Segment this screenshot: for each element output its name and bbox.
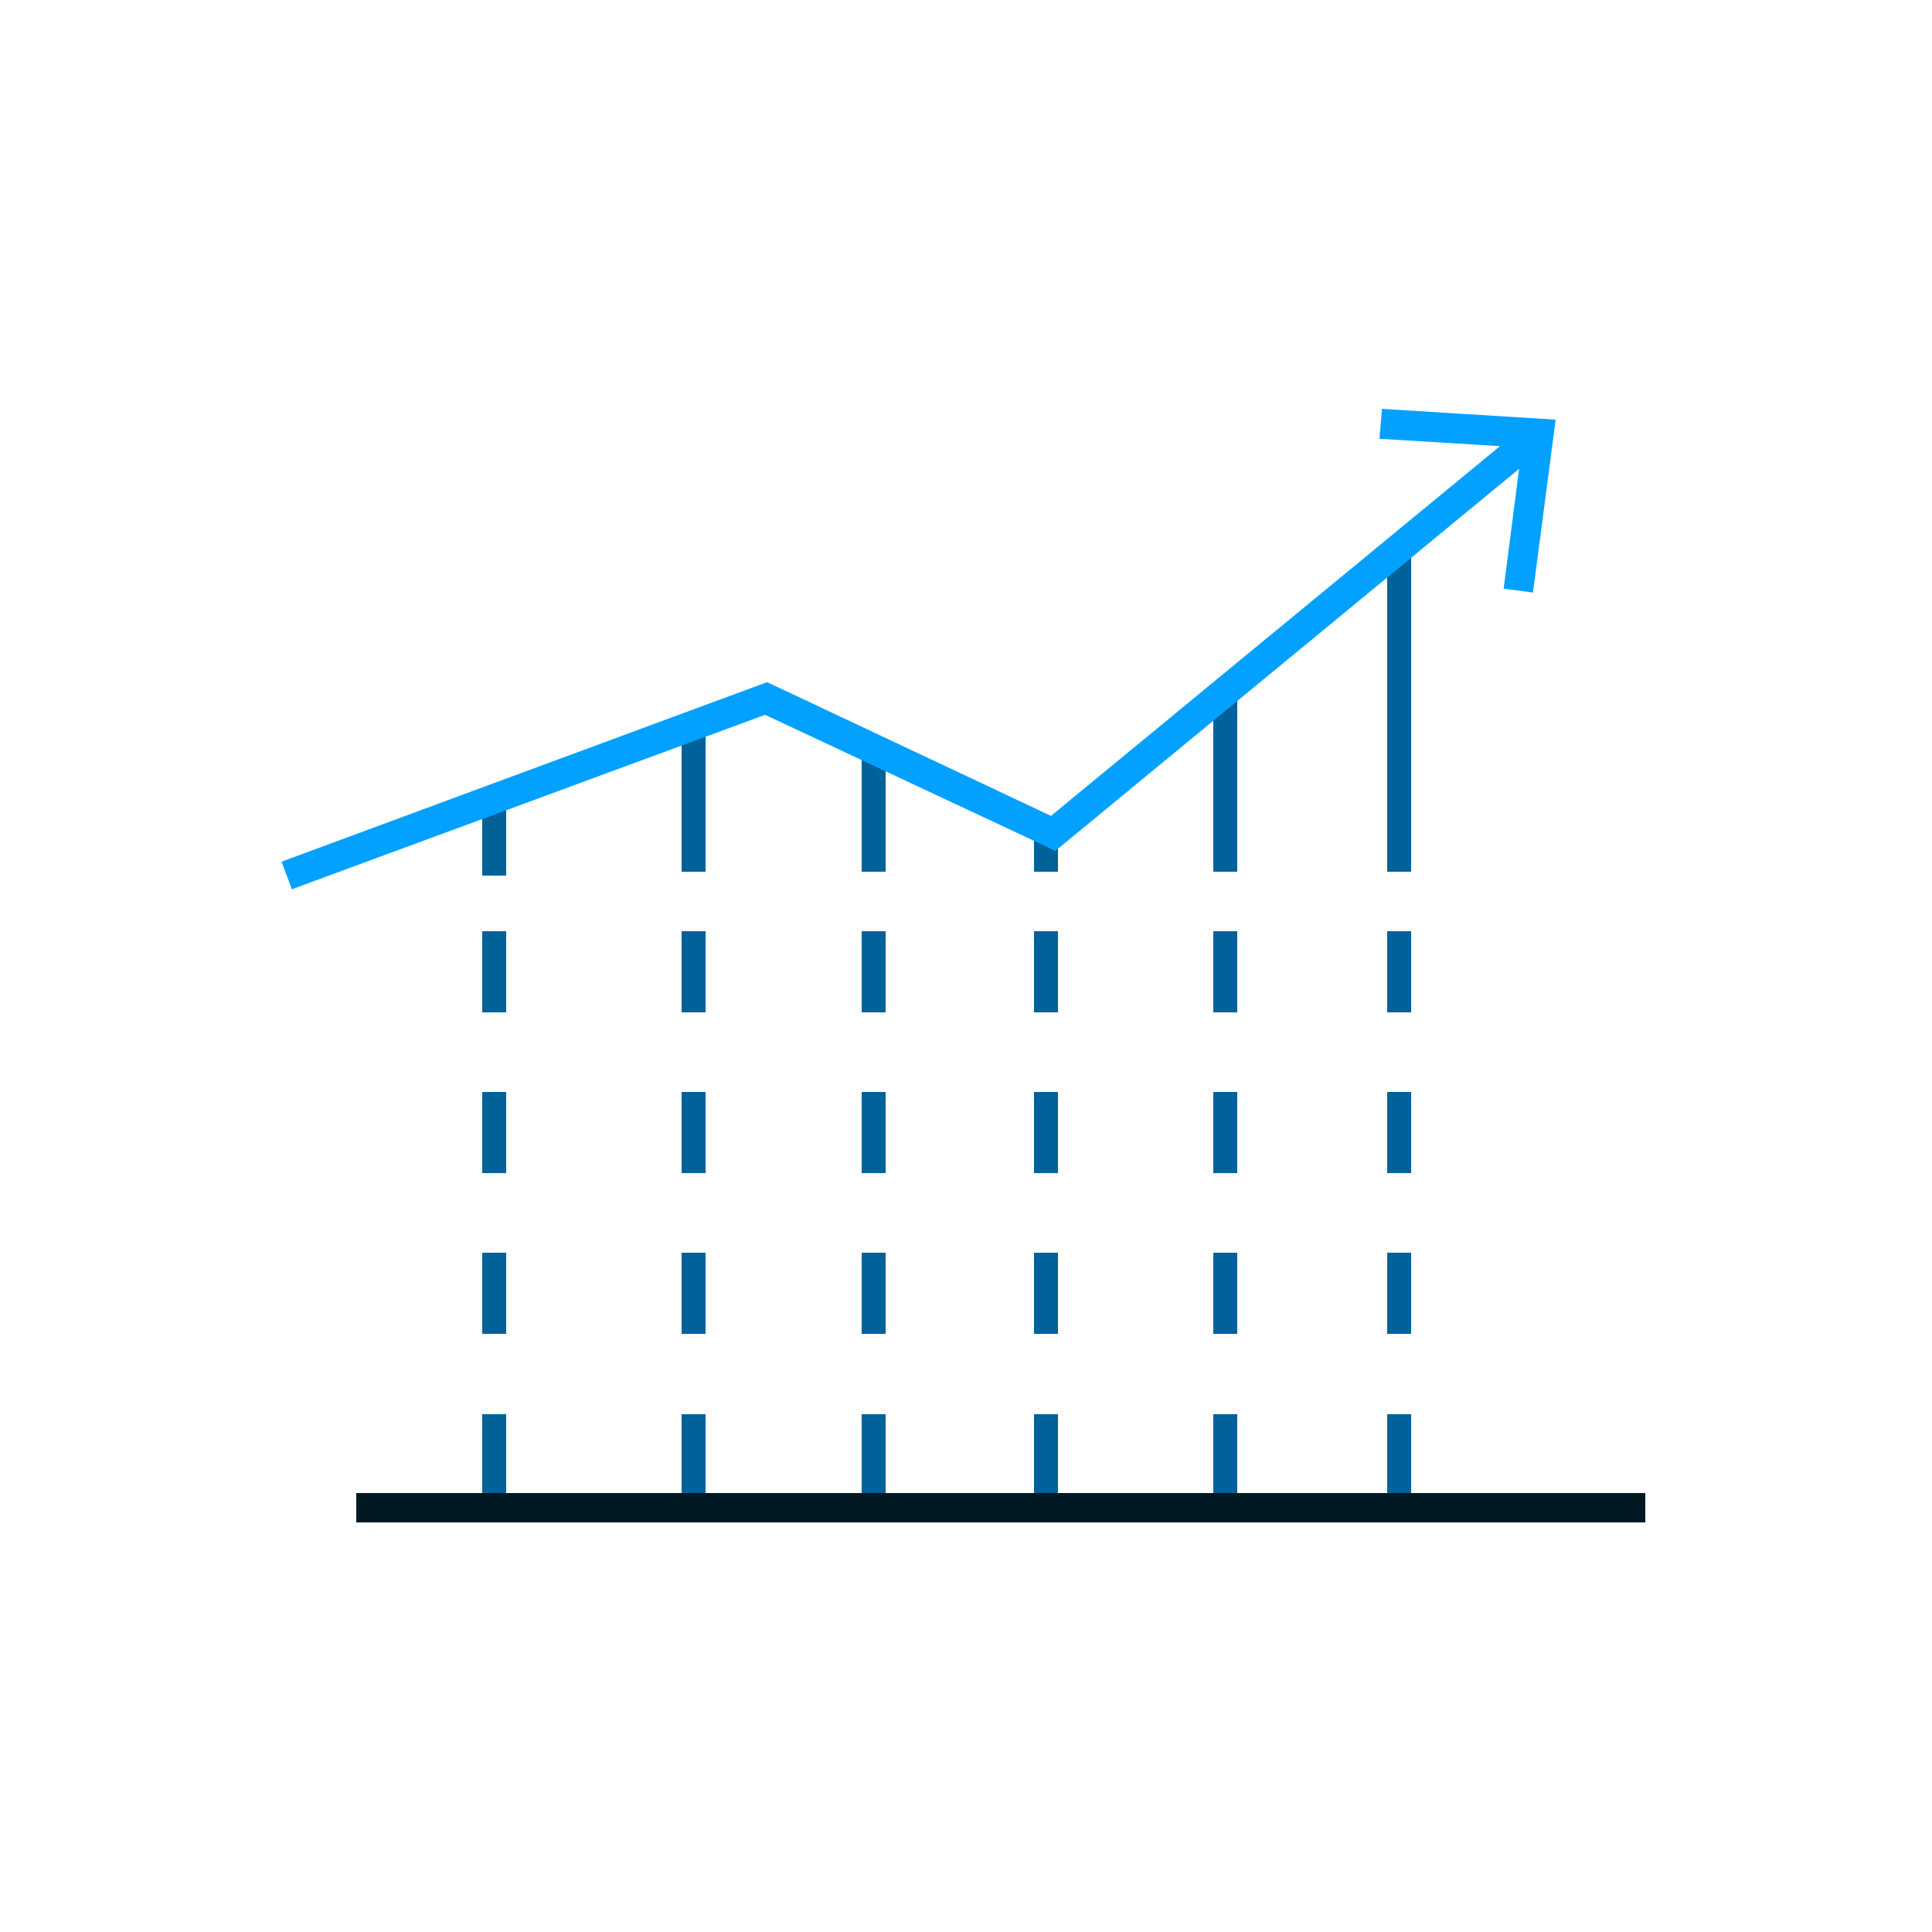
dashed bar 5 xyxy=(1213,692,1237,1499)
dashed bar 3 xyxy=(862,749,886,1499)
baseline axis xyxy=(356,1493,1645,1522)
dashed bars xyxy=(482,550,1411,1499)
dashed bar 6 xyxy=(1387,550,1411,1499)
trend line arrow xyxy=(281,409,1556,889)
dashed bar 1 xyxy=(482,799,506,1499)
dashed bar 4 xyxy=(1034,829,1058,1499)
dashed bar 2 xyxy=(682,726,706,1499)
